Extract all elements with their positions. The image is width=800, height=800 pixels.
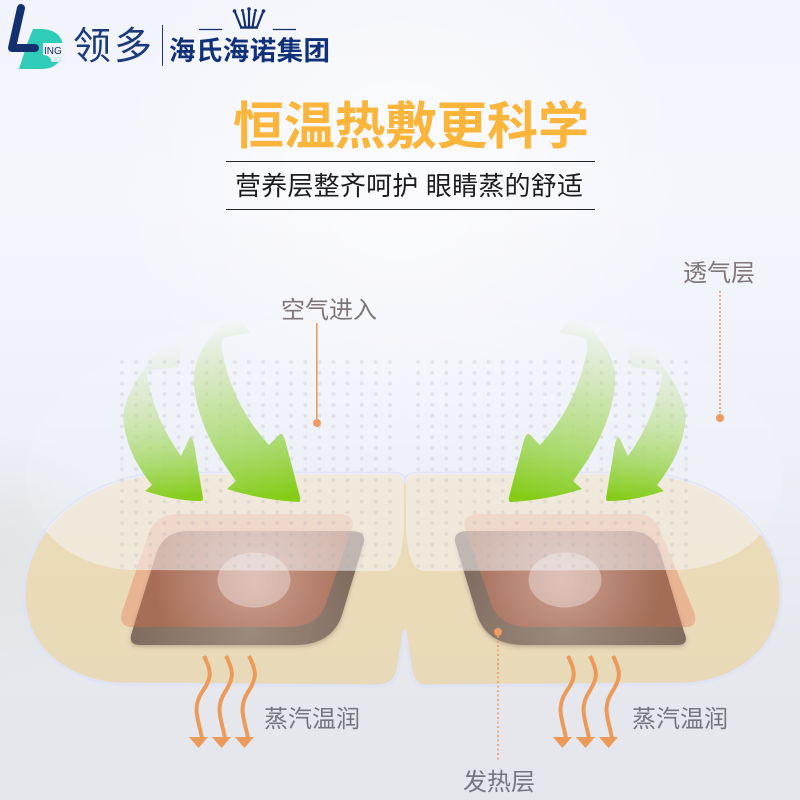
divider xyxy=(162,25,163,66)
label: air intake xyxy=(281,297,377,427)
label: breathable layer: 透气层 xyxy=(683,260,755,287)
air arrows: right xyxy=(509,308,686,502)
label: heating layer xyxy=(463,628,535,796)
steam label: right: 蒸汽温润 xyxy=(632,706,728,733)
air arrows: left xyxy=(123,308,300,502)
label: heating layer: 发热层 xyxy=(463,769,535,796)
group name: 海氏海诺集团 xyxy=(169,36,330,66)
icon: LD monogram: ING xyxy=(44,46,62,57)
logo: Ling Duo xyxy=(12,8,155,69)
eye mask body xyxy=(24,473,781,686)
icon: LD monogram: UO xyxy=(50,55,61,64)
heating pad: left xyxy=(121,514,364,645)
logo: group name with crown xyxy=(169,7,330,66)
steam arrows: left xyxy=(189,656,255,748)
icon: crown xyxy=(199,7,296,29)
breathable layer xyxy=(46,360,761,571)
brand name: 领多 xyxy=(73,26,155,68)
subtitle with rules: 营养层整齐呵护 眼睛蒸的舒适 xyxy=(235,171,583,201)
label: breathable layer xyxy=(683,260,755,422)
heating pad: right xyxy=(455,514,695,645)
title: 恒温热敷更科学 xyxy=(233,98,589,155)
label: air intake: 空气进入 xyxy=(281,297,377,324)
steam label: left: 蒸汽温润 xyxy=(264,706,360,733)
steam arrows: right xyxy=(553,656,619,748)
icon: LD monogram xyxy=(12,8,65,69)
